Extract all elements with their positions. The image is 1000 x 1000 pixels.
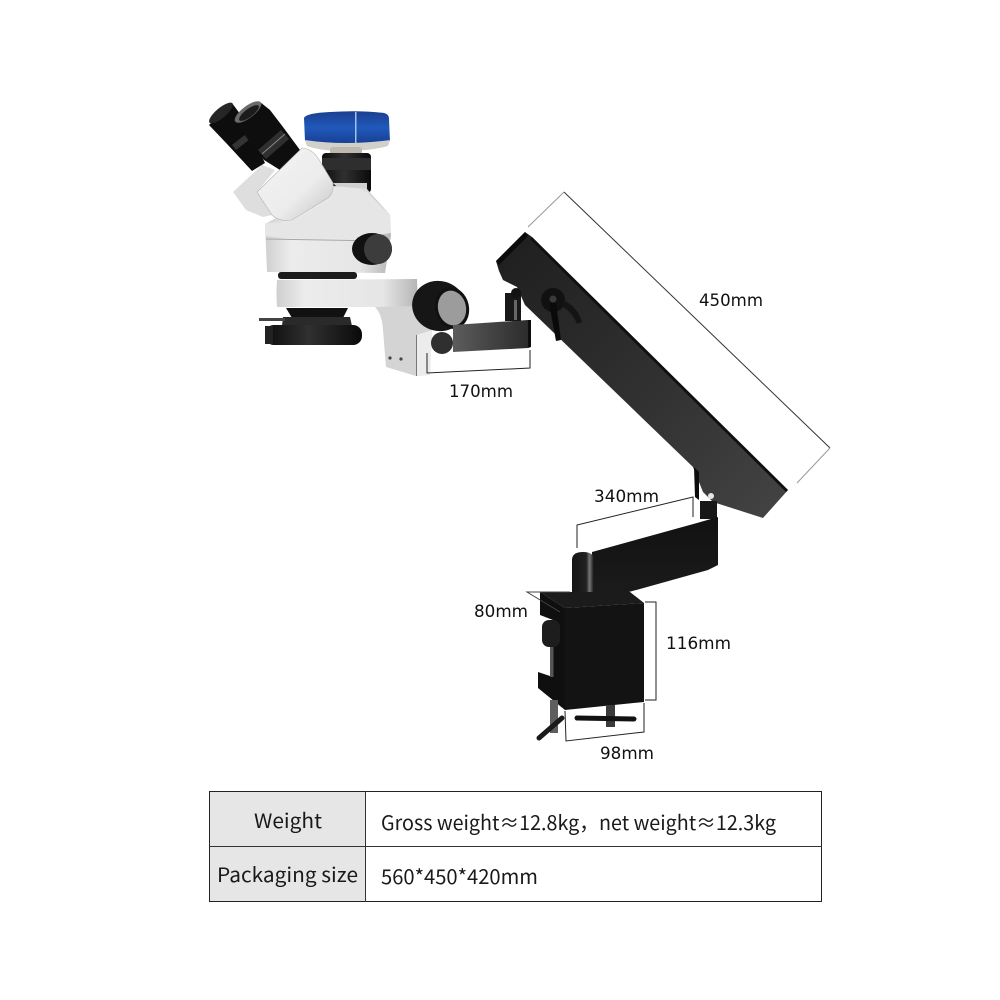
support arm lower xyxy=(572,501,718,605)
clamp base xyxy=(538,592,644,738)
icon: bolt xyxy=(708,493,714,499)
icon: zoom knob xyxy=(352,233,392,265)
dimension: 98mm xyxy=(565,703,654,764)
icon: body base ring xyxy=(278,272,357,279)
dimension: 170mm: 170mm xyxy=(449,382,513,402)
row: weight xyxy=(210,792,776,846)
icon: blue camera xyxy=(304,111,390,156)
dimension: 116mm: 116mm xyxy=(666,634,731,654)
dimension: 450mm: 450mm xyxy=(699,291,763,311)
icon: right prism housing xyxy=(257,148,333,220)
icon: T handle xyxy=(577,705,634,727)
microscope white body xyxy=(265,186,391,273)
icon: clamp screw with handle xyxy=(539,700,562,738)
large black arm panel xyxy=(496,232,788,518)
icon: left eyepiece xyxy=(206,100,265,171)
icon: right eyepiece xyxy=(232,98,300,170)
microscope head assembly xyxy=(206,98,473,376)
icon: LED ring light xyxy=(259,308,362,345)
row: weight: Gross weight≈12.8kg，net weight≈12.3kg xyxy=(381,807,776,836)
row: weight: Weight xyxy=(254,805,322,834)
icon: locking lever xyxy=(541,288,582,341)
icon: small pivot knob xyxy=(431,332,453,354)
icon: camera adapter ring xyxy=(322,153,371,195)
dimension: 340mm: 340mm xyxy=(594,487,659,507)
support arm upper xyxy=(431,293,531,354)
row: packaging size: 560*450*420mm xyxy=(381,861,538,890)
dimension: 80mm: 80mm xyxy=(474,602,528,622)
icon: clamp knob xyxy=(542,620,560,647)
icon: left prism housing xyxy=(233,165,275,217)
specification table xyxy=(209,791,822,902)
dimension: 80mm xyxy=(474,592,570,622)
ring holder and stand xyxy=(276,279,432,376)
dimension: 450mm xyxy=(528,192,830,483)
dimension: 170mm xyxy=(427,350,530,402)
dimension: 98mm: 98mm xyxy=(600,744,654,764)
row: packaging size: Packaging size xyxy=(217,859,358,888)
row: packaging size xyxy=(210,846,538,902)
icon: focus knob xyxy=(406,275,473,337)
dimension: 116mm xyxy=(645,602,731,700)
dimension: 340mm xyxy=(577,487,693,548)
icon: pivot joint xyxy=(511,288,521,298)
